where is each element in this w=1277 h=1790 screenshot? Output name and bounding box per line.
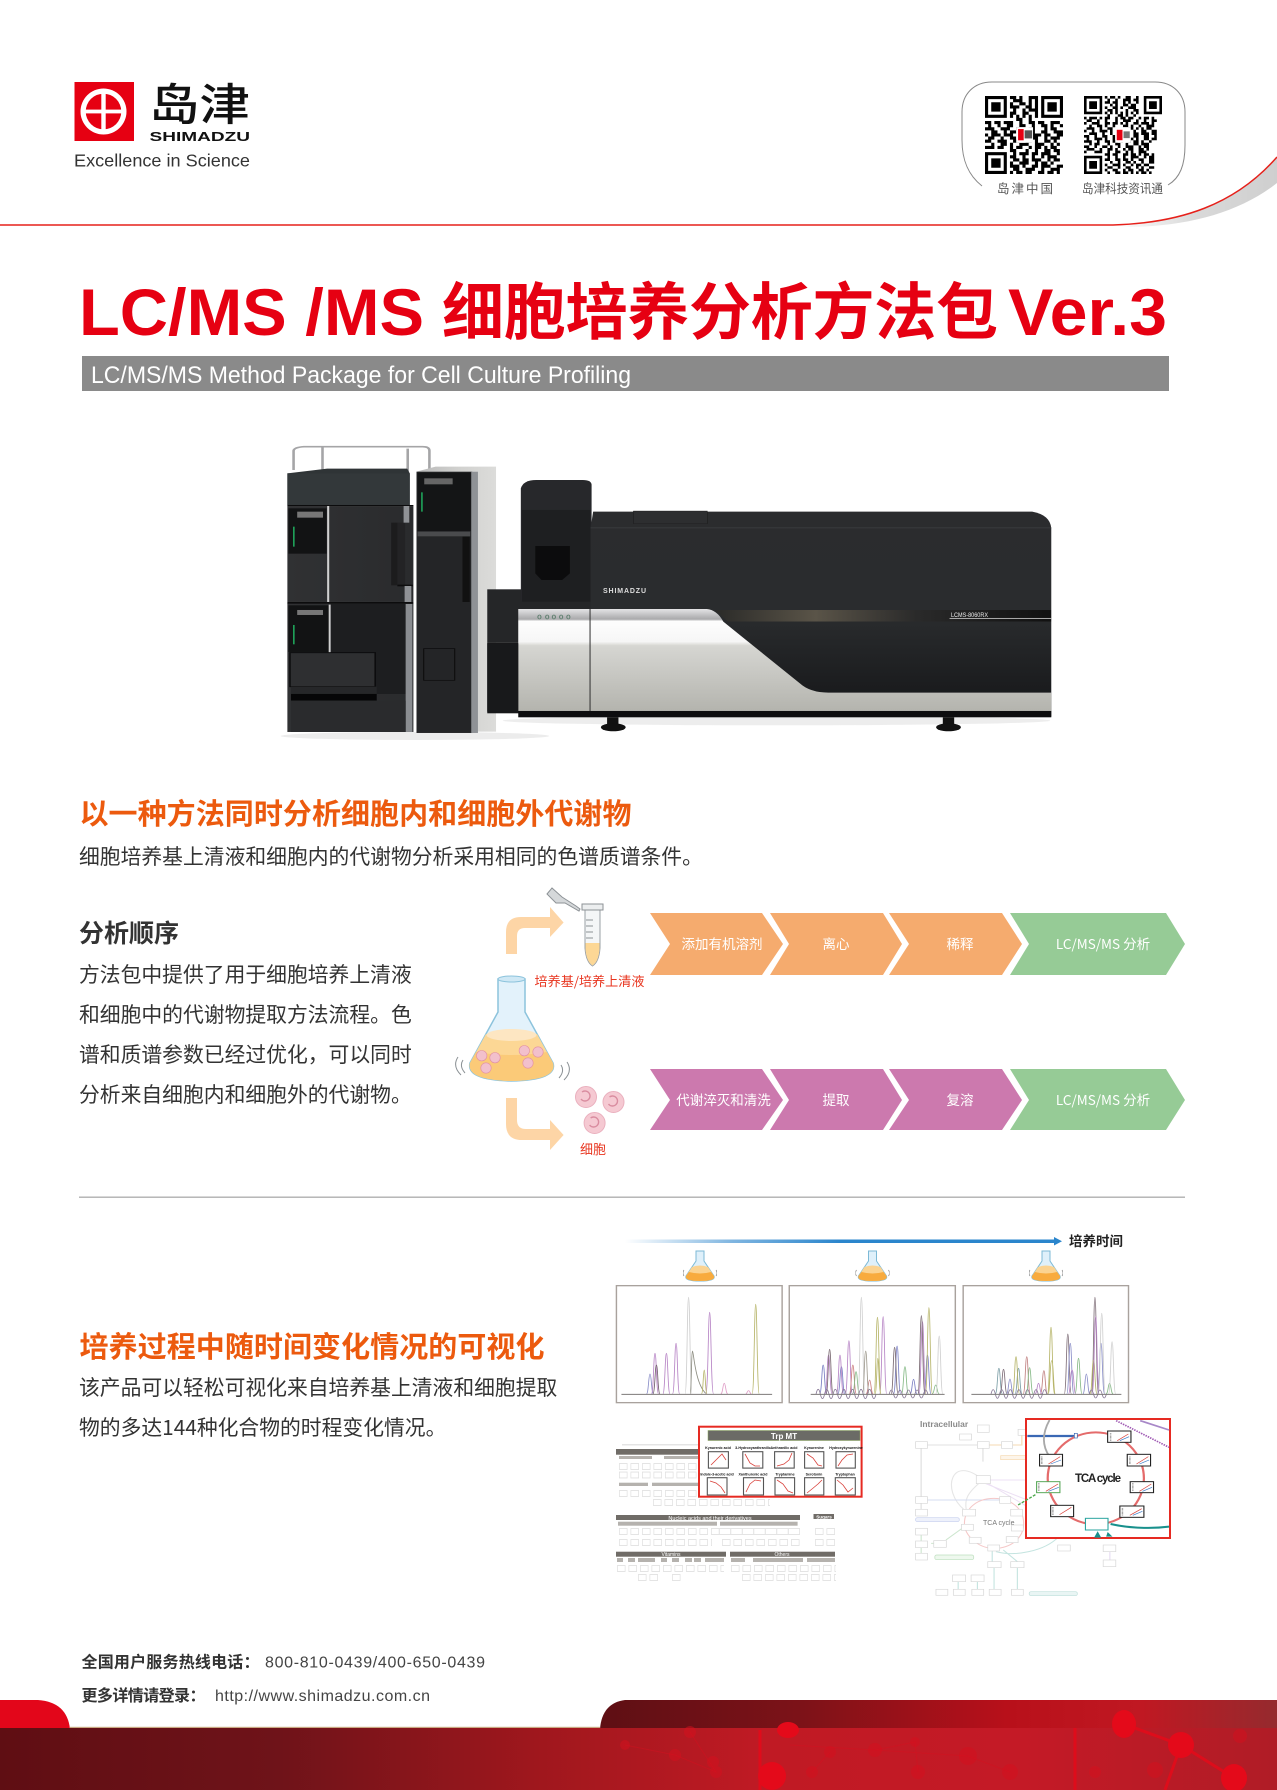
autosampler tower: [521, 480, 592, 602]
faded compound table: Sugars: [816, 1514, 832, 1520]
label: medium / supernatant: 培养基/培养上清液: [534, 971, 644, 990]
QR label 1: 岛津中国: [997, 178, 1053, 197]
chromatogram 3: [971, 1297, 1121, 1398]
flow: supernatant process: LC/MS/MS 分析: [1056, 933, 1150, 953]
subtitle bar: LC/MS/MS Method Package for Cell Culture Profiling: [91, 362, 631, 389]
chromatogram frames: [616, 1286, 1129, 1403]
callout: Trp MT: Kynurenic acid: [705, 1446, 731, 1450]
silver wedge: [518, 609, 1051, 711]
callout: Trp MT: Anthranilic acid: [771, 1446, 797, 1450]
label: intracellular: Intracellular: [920, 1419, 969, 1429]
chart: chromatograms over culture time: [616, 1286, 1129, 1403]
flow: cell process: LC/MS/MS 分析: [1056, 1089, 1150, 1109]
logo: Shimadzu: [74, 69, 250, 170]
label: small TCA: TCA cycle: [983, 1520, 1015, 1527]
subheading: 分析顺序: [79, 914, 179, 950]
callout: Trp MT: Hydroxykynurenine: [829, 1446, 863, 1450]
title: [79, 262, 1167, 352]
LC column oven: [416, 467, 496, 732]
molecule decoration: [620, 1710, 1247, 1790]
arrow: down to cells: [506, 1098, 564, 1150]
website: 更多详情请登录：: [82, 1682, 206, 1706]
heading: simultaneous analysis: 以一种方法同时分析细胞内和细胞外代谢物: [80, 791, 632, 833]
arrow: up to supernatant: [506, 907, 564, 954]
title: 细胞培养分析方法包: [442, 262, 998, 352]
callout: Trp MT: 3-Hydroxyanthranilic: [735, 1446, 771, 1450]
logo text: 岛津: [149, 69, 250, 133]
callout: TCA cycle: [1018, 1419, 1170, 1538]
text block: time course: [79, 1371, 558, 1441]
paragraph: 方法包中提供了用于细胞培养上清液: [79, 958, 412, 988]
QR frame: [962, 82, 1185, 186]
panel: metabolic pathway map: [916, 1419, 1170, 1596]
header swoosh line: [0, 157, 1277, 227]
paragraph: 分析来自细胞内和细胞外的代谢物。: [79, 1078, 412, 1108]
callout: Trp MT: Tryptophan: [835, 1472, 855, 1476]
icon: Shimadzu mark: [74, 82, 134, 141]
website: [82, 1682, 430, 1706]
handle frame: [294, 447, 429, 472]
icon: cells: [576, 1086, 624, 1134]
faded compound table: Vitamins: [661, 1552, 681, 1558]
flow: cell process: [650, 1069, 1185, 1130]
LC stack: [287, 469, 410, 505]
faded compound table: Nucleic acids and their derivatives: [668, 1516, 752, 1522]
logo wordmark: SHIMADZU: [150, 130, 250, 144]
icon: culture flask: [456, 976, 569, 1081]
flow: supernatant process: [650, 913, 1185, 975]
QR label 2: 岛津科技资讯通: [1082, 178, 1163, 197]
paragraph: [79, 958, 412, 1108]
title: Ver.3: [1008, 275, 1167, 349]
hotline: 800-810-0439/400-650-0439: [265, 1654, 485, 1672]
arrow: culture time: 培养时间: [1069, 1230, 1123, 1250]
footer left red tab: [0, 1700, 70, 1729]
panel: QR codes: [962, 82, 1185, 197]
model name on instrument: LCMS-8060RX: [951, 612, 989, 619]
chromatogram 1: [621, 1297, 772, 1394]
footer banner: [0, 1700, 1277, 1790]
QR code 1: [985, 96, 1063, 174]
callout: Trp MT: Serotonin: [806, 1472, 822, 1476]
flow: supernatant process: 稀释: [946, 933, 974, 953]
flow: cell process: 复溶: [946, 1089, 974, 1109]
brand text on instrument: SHIMADZU: [603, 588, 646, 595]
faded pathway: [916, 1425, 1116, 1596]
QR code 2: [1084, 96, 1162, 174]
faded compound table: Others: [774, 1552, 790, 1558]
instrument: LC/MS/MS system photo: [281, 447, 1051, 740]
flow: cell process: 代谢淬灭和清洗: [676, 1089, 771, 1109]
text block: time course: 该产品可以轻松可视化来自培养基上清液和细胞提取: [79, 1371, 558, 1401]
panel: analysis procedure text: [79, 914, 412, 1108]
autosampler base: [487, 589, 593, 643]
text block: time course: 物的多达144种化合物的时程变化情况。: [79, 1411, 446, 1441]
hotline: 全国用户服务热线电话：: [82, 1648, 260, 1672]
title: LC/MS /MS: [79, 275, 424, 349]
shadow: [281, 732, 549, 740]
flow: cell process: 提取: [822, 1089, 850, 1109]
footer band: [0, 1728, 1277, 1790]
callout: TCA cycle: TCA cycle: [1075, 1473, 1121, 1485]
callout: Trp MT: Indole-3-acetic acid: [700, 1472, 734, 1476]
callout: Trp MT: Trp MT: [771, 1432, 797, 1441]
text block: intro: 细胞培养基上清液和细胞内的代谢物分析采用相同的色谱质谱条件。: [79, 840, 703, 870]
label: cells: 细胞: [580, 1139, 606, 1158]
faded compound table: [616, 1444, 836, 1578]
footer right tab: [600, 1700, 1277, 1729]
chromatogram 2: [811, 1297, 945, 1399]
callout: Trp MT: Xanthurenic acid: [739, 1472, 767, 1476]
text block: contact info: [82, 1648, 485, 1706]
flow: supernatant process: 添加有机溶剂: [682, 933, 762, 953]
feet: [601, 717, 961, 731]
callout: Trp MT: [699, 1427, 863, 1497]
website: http://www.shimadzu.com.cn: [215, 1688, 430, 1705]
tagline: Excellence in Science: [74, 150, 250, 170]
callout: Trp MT: Kynurenine: [804, 1446, 824, 1450]
icons: small flasks: [683, 1251, 1063, 1281]
paragraph: 谱和质谱参数已经过优化，可以同时: [79, 1038, 412, 1068]
hotline: [82, 1648, 485, 1672]
heading: time course visualization: 培养过程中随时间变化情况的可视化: [80, 1324, 544, 1366]
flow: supernatant process: 离心: [822, 933, 850, 953]
indicators: [538, 615, 570, 619]
arrow: culture time: [625, 1230, 1123, 1250]
callout: Trp MT: Tryptamine: [775, 1472, 795, 1476]
paragraph: 和细胞中的代谢物提取方法流程。色: [79, 998, 412, 1028]
MS main body: [591, 512, 1051, 717]
panel: compound heatmap overview: [616, 1427, 863, 1578]
icon: sample tube with pipette: [547, 888, 603, 966]
subtitle bar: [82, 356, 1169, 391]
